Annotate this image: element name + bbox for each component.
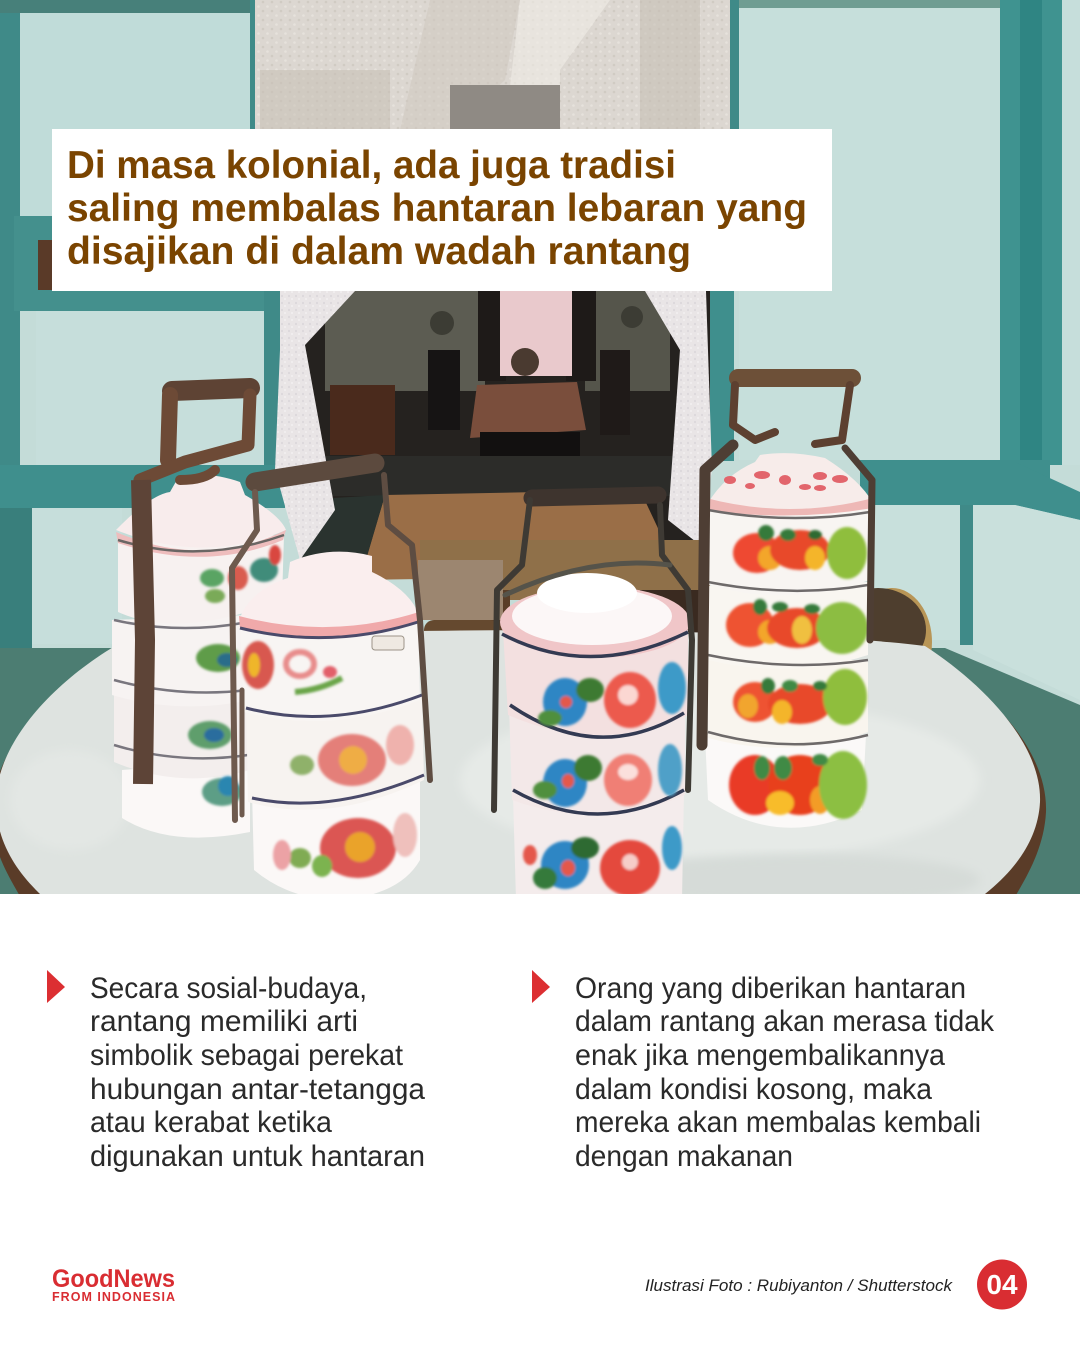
text block: right column [575, 972, 994, 1173]
heading text [67, 144, 807, 273]
interior room seen through doorway [300, 290, 710, 580]
floral decoration [188, 545, 281, 806]
text block: left column: digunakan untuk hantaran [90, 1140, 425, 1173]
text block: right column: dalam kondisi kosong, maka [575, 1073, 933, 1106]
handle and wires [494, 495, 692, 810]
rantang stack C, front centre [494, 495, 692, 900]
rear brown material and straw [420, 540, 710, 632]
icon: right red arrow bullet [532, 970, 550, 1003]
floral decoration [242, 641, 417, 878]
side curtains [275, 291, 712, 560]
round basket [873, 588, 932, 650]
text block: right column: Orang yang diberikan hantaran [575, 972, 966, 1005]
icon: left red arrow bullet [47, 970, 65, 1003]
photo: enamel rantang stacks on marble table [0, 0, 1080, 906]
photo credit: Ilustrasi Foto : Rubiyanton / Shutterstock [645, 1276, 953, 1295]
lace curtain top [255, 0, 730, 132]
handle and wires [232, 463, 430, 820]
wall and teal frames [0, 0, 1080, 894]
page number badge: 04 [986, 1269, 1018, 1300]
marble table [0, 630, 1046, 906]
rantang stack D, rear right [702, 378, 873, 828]
text block: left column: atau kerabat ketika [90, 1106, 333, 1139]
heading text: Di masa kolonial, ada juga tradisi [67, 144, 676, 187]
heading panel [52, 129, 832, 291]
logo: GoodNews from Indonesia [52, 1265, 175, 1304]
heading text: saling membalas hantaran lebaran yang [67, 187, 807, 230]
pink lid pattern [724, 471, 848, 491]
fruit decoration [726, 525, 868, 819]
text block: left column: simbolik sebagai perekat [90, 1039, 403, 1072]
text block: left column [90, 972, 426, 1173]
rusty handle [702, 378, 872, 745]
rusty handle [140, 388, 250, 784]
floral decoration [523, 662, 686, 896]
text block: left column: hubungan antar-tetangga [90, 1073, 426, 1106]
text block: right column: mereka akan membalas kembali [575, 1106, 981, 1139]
text block: right column: dalam rantang akan merasa tidak [575, 1005, 994, 1038]
rantang stack B, front left [232, 463, 430, 900]
text block: right column: enak jika mengembalikannya [575, 1039, 946, 1072]
heading text: disajikan di dalam wadah rantang [67, 230, 691, 273]
rantang stack A, rear left [112, 388, 286, 838]
logo: GoodNews from Indonesia: GoodNews [52, 1265, 175, 1293]
page number badge [977, 1260, 1027, 1310]
text block: left column: Secara sosial-budaya, [90, 972, 367, 1005]
glass jar [418, 560, 503, 631]
text block: right column: dengan makanan [575, 1140, 793, 1173]
text block: left column: rantang memiliki arti [90, 1005, 358, 1038]
logo: GoodNews from Indonesia: FROM INDONESIA [52, 1290, 175, 1304]
